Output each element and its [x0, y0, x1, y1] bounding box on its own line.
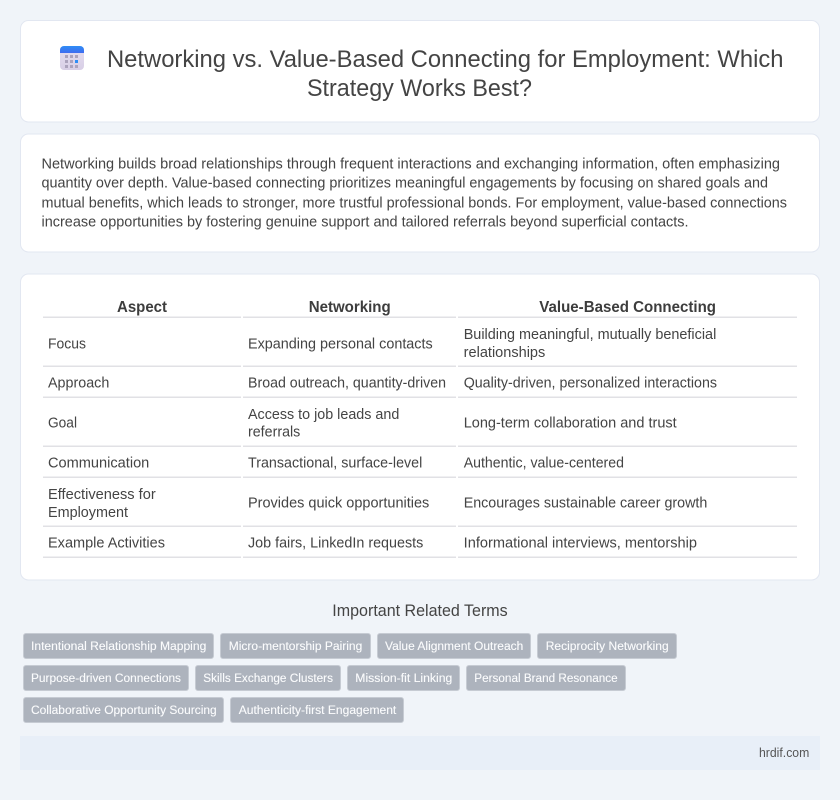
table row: Focus: Focus	[48, 336, 86, 352]
table row: Effectiveness for Employment: Effectiveness for	[48, 487, 156, 503]
tag	[230, 698, 404, 722]
panel: summary paragraph	[20, 134, 820, 252]
tag	[378, 634, 530, 658]
tag	[24, 666, 188, 690]
tag	[348, 666, 460, 690]
tag: Collaborative Opportunity Sourcing	[31, 703, 217, 717]
table row: Effectiveness for Employment	[43, 487, 797, 527]
table row: Communication: Communication	[48, 456, 149, 472]
tag: Micro-mentorship Pairing	[229, 639, 362, 653]
table header	[43, 299, 797, 318]
tag	[196, 666, 340, 690]
table row: Focus: Expanding personal contacts	[248, 336, 433, 352]
table row: Example Activities	[43, 536, 797, 558]
table row: Goal	[43, 407, 797, 447]
table row: Goal: Long-term collaboration and trust	[464, 416, 677, 432]
table row: Example Activities: Job fairs, LinkedIn requests	[248, 536, 423, 552]
tag: Personal Brand Resonance	[474, 671, 618, 685]
table row: Effectiveness for Employment: Employment	[48, 505, 128, 521]
heading: related terms: Important Related Terms	[332, 602, 508, 620]
table row: Approach	[43, 376, 797, 398]
tag	[466, 666, 626, 690]
table row: Communication: Transactional, surface-level	[248, 456, 422, 472]
table row: Focus: relationships	[464, 345, 545, 361]
table row: Goal: Access to job leads and	[248, 407, 399, 423]
table row: Example Activities: Example Activities	[48, 536, 165, 552]
table row: Goal: Goal	[48, 416, 77, 432]
tag	[24, 698, 224, 722]
table row: Focus	[43, 327, 797, 367]
table header: Aspect	[117, 299, 168, 316]
tag	[24, 634, 214, 658]
title	[107, 46, 784, 102]
tag: Reciprocity Networking	[546, 639, 669, 653]
table header: Value-Based Connecting	[539, 299, 716, 316]
panel: related term tags	[24, 634, 676, 722]
table row: Approach: Broad outreach, quantity-driven	[248, 376, 446, 392]
icon: calendar	[60, 46, 84, 70]
table row: Approach: Quality-driven, personalized interactions	[464, 376, 717, 392]
table row: Communication: Authentic, value-centered	[464, 456, 624, 472]
table row: Focus: Building meaningful, mutually beneficial	[464, 327, 716, 343]
footer	[20, 736, 820, 770]
text block: summary: Networking builds broad relationships through frequent interactions and exchanging information, often emphasizing	[42, 156, 780, 172]
tag: Skills Exchange Clusters	[203, 671, 333, 685]
table row: Effectiveness for Employment: Provides quick opportunities	[248, 496, 429, 512]
table row: Communication	[43, 456, 797, 478]
text block: summary	[42, 156, 787, 231]
table header: Networking	[309, 299, 391, 316]
table row: Effectiveness for Employment: Encourages sustainable career growth	[464, 496, 707, 512]
text block: summary: increase opportunities by fostering genuine support and tailored referrals beyond superficial contacts.	[42, 215, 688, 231]
tag: Purpose-driven Connections	[31, 671, 181, 685]
title: Strategy Works Best?	[307, 75, 532, 102]
tag: Authenticity-first Engagement	[239, 703, 397, 717]
tag: Intentional Relationship Mapping	[31, 639, 206, 653]
table row: Goal: referrals	[248, 425, 300, 441]
panel: title header	[20, 20, 820, 122]
text block: summary: mutual benefits, which leads to stronger, more trustful professional bonds. For employment, value-based connections	[42, 195, 787, 211]
footer: hrdif.com	[759, 745, 809, 760]
title: Networking vs. Value-Based Connecting for Employment: Which	[107, 46, 784, 73]
tag	[220, 634, 370, 658]
panel: comparison table	[20, 274, 820, 580]
table row: Approach: Approach	[48, 376, 109, 392]
table row: Example Activities: Informational interviews, mentorship	[464, 536, 697, 552]
text block: summary: quantity over depth. Value-based connecting prioritizes meaningful engagements by focusing on shared goals and	[42, 176, 768, 192]
tag: Mission-fit Linking	[355, 671, 452, 685]
tag: Value Alignment Outreach	[385, 639, 523, 653]
tag	[538, 634, 676, 658]
